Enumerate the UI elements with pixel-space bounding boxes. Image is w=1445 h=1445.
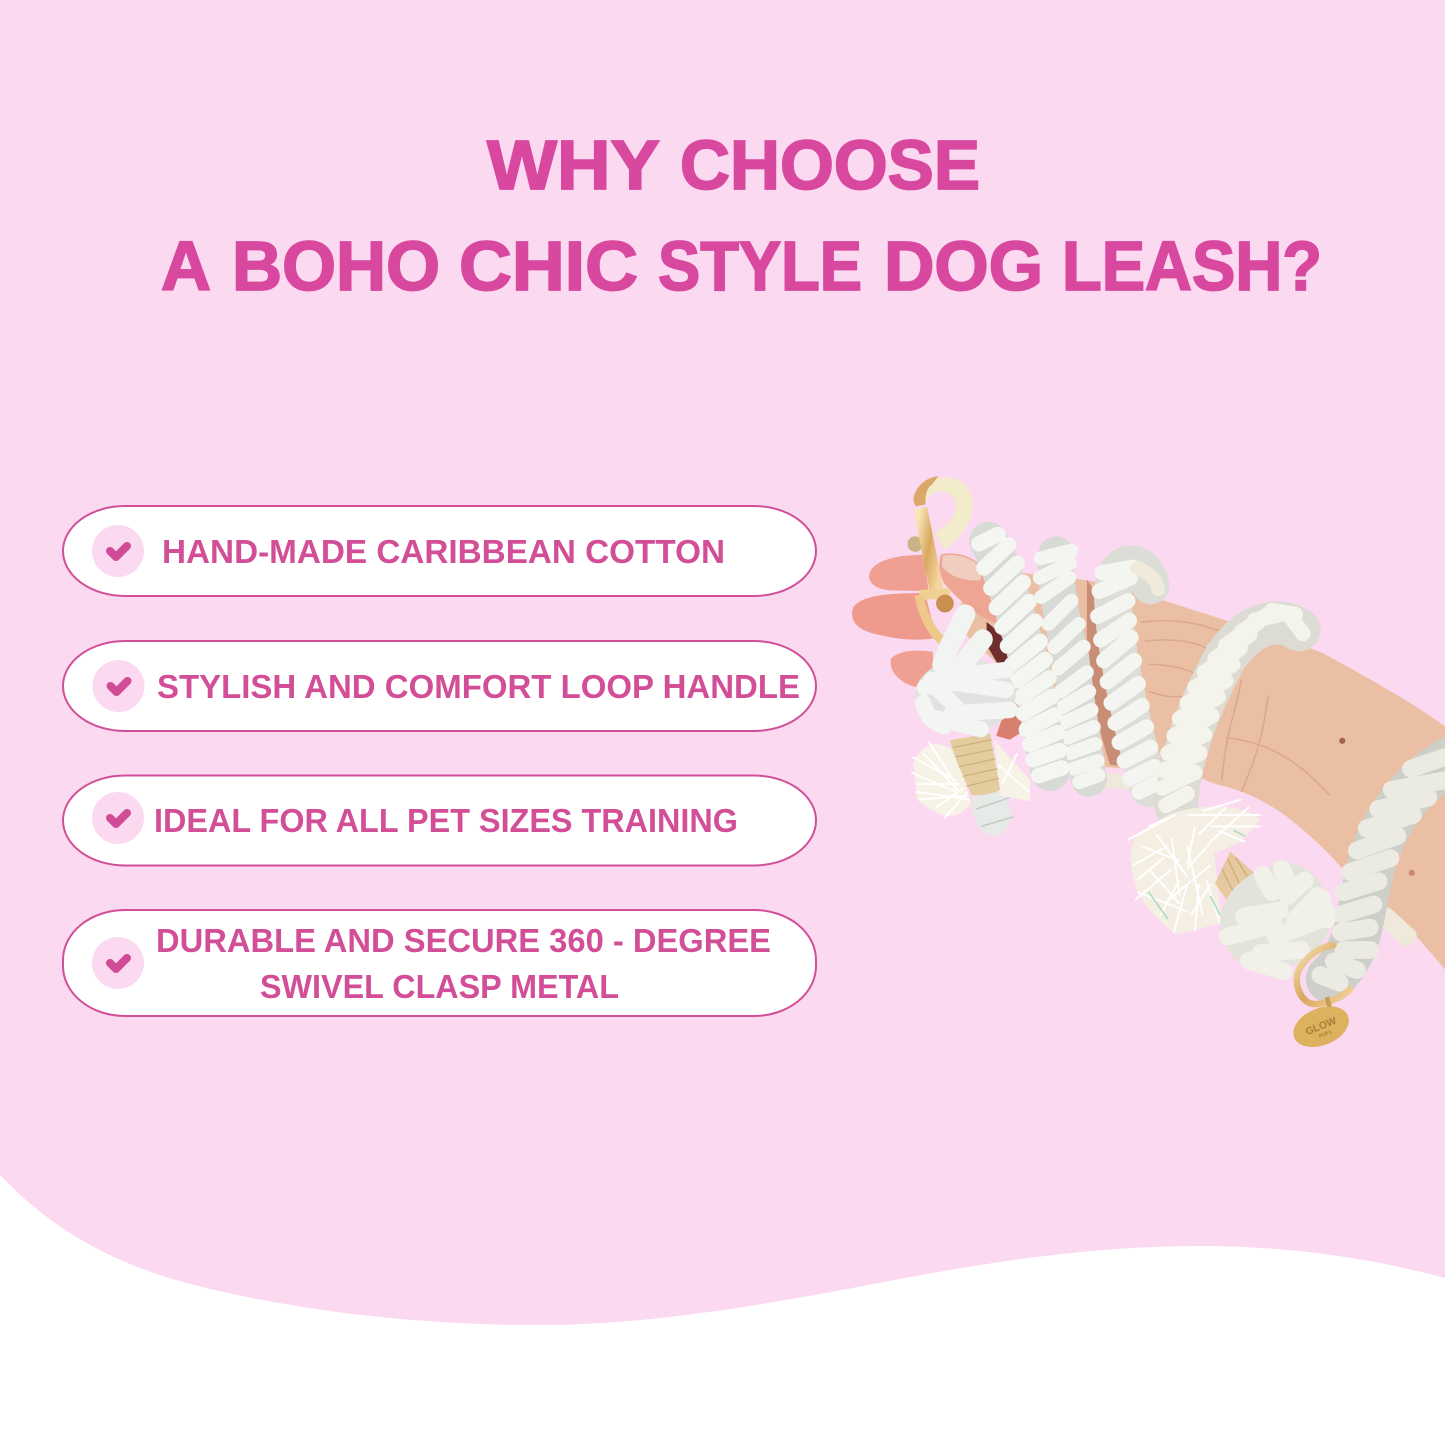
- benefit pill: all pet sizes: IDEAL FOR ALL PET SIZES TRAINING: [154, 802, 738, 839]
- title: BOHO: [232, 227, 440, 305]
- rope coil four: [1162, 610, 1303, 807]
- benefit pill: swivel clasp: SWIVEL CLASP METAL: [260, 968, 619, 1005]
- rope coil one: [979, 534, 1062, 776]
- title: DOG: [884, 227, 1043, 305]
- benefit pill: swivel clasp: DURABLE AND SECURE 360 - DEGREE: [156, 922, 771, 959]
- leash rope coils: [979, 534, 1445, 983]
- hand and forearm: [952, 568, 1445, 970]
- benefit pill: hand-made cotton: [63, 506, 816, 596]
- benefit pill: swivel clasp: [63, 910, 816, 1016]
- title: CHIC: [459, 227, 638, 305]
- metal ring: [1297, 945, 1350, 1004]
- rope knot, left end: [915, 614, 1016, 732]
- rope coil two: [1040, 551, 1098, 782]
- cord wrap and fringe, right end: [1127, 800, 1261, 935]
- title: STYLE: [658, 227, 862, 305]
- metal snap clasp: [908, 476, 973, 647]
- rope knot, right end: [1220, 863, 1331, 971]
- cord wrap and fringe, left end: [911, 734, 1030, 836]
- fingers and thumb: [852, 553, 1010, 687]
- title: A: [161, 227, 211, 305]
- rope coil three: [1098, 564, 1158, 792]
- benefit pill: all pet sizes: [63, 776, 816, 866]
- gold brand tag: PUPS: [1318, 1029, 1334, 1040]
- benefit pill: hand-made cotton: HAND-MADE CARIBBEAN COTTON: [162, 533, 725, 570]
- rope coil five: [1320, 757, 1445, 983]
- gold brand tag: [1287, 997, 1355, 1055]
- title: [161, 126, 1322, 305]
- title: LEASH?: [1062, 227, 1322, 305]
- title: CHOOSE: [680, 126, 980, 204]
- benefit pill: loop handle: STYLISH AND COMFORT LOOP HANDLE: [157, 668, 800, 705]
- benefit pill: loop handle: [63, 641, 816, 731]
- title: WHY: [487, 126, 660, 204]
- product photo: hand holding rope leash: [852, 476, 1445, 1055]
- gold brand tag: GLOW: [1304, 1016, 1338, 1038]
